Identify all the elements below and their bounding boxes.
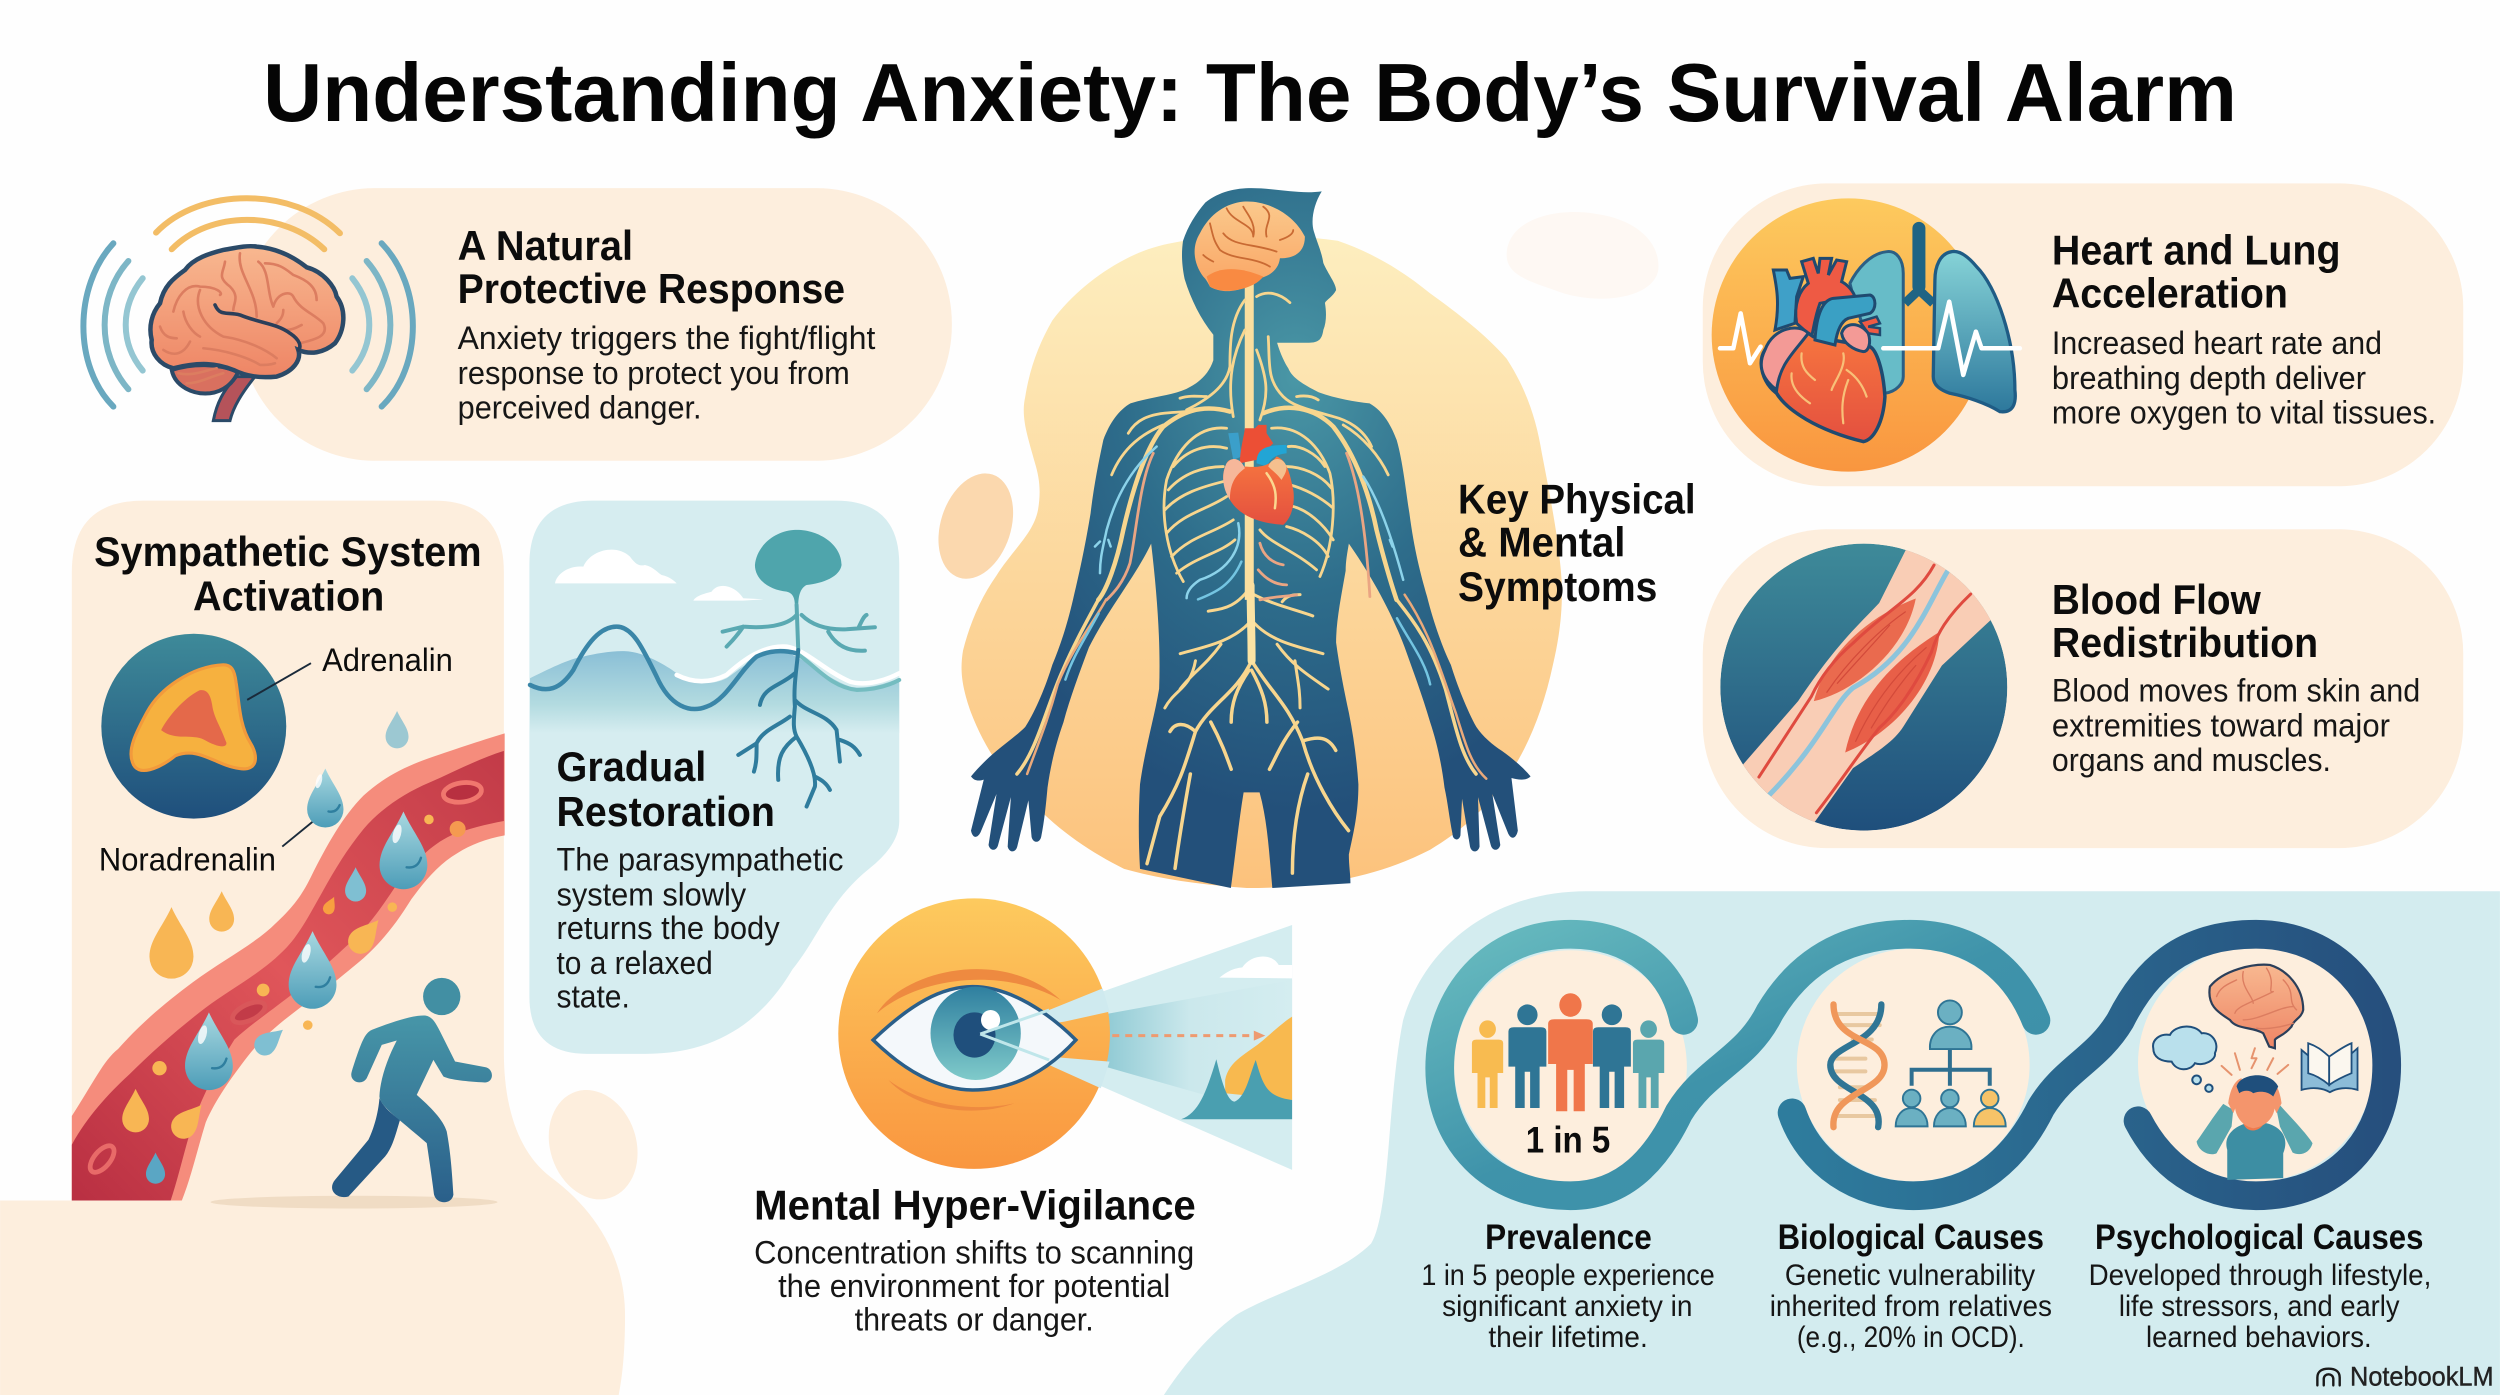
icon: group of people (1472, 993, 1664, 1111)
body text: system slowly (556, 876, 747, 913)
icon: stressed person (2197, 1075, 2313, 1180)
illustration: blood vessel (72, 733, 505, 1200)
icon: running figure (332, 978, 492, 1202)
heading: Blood Flow (2052, 576, 2261, 623)
heading: Mental Hyper-Vigilance (754, 1182, 1196, 1229)
clouds (555, 550, 763, 601)
caption: prevalence (1421, 1218, 1715, 1354)
caption: psychological causes: life stressors, and early (2119, 1290, 2400, 1323)
caption: biological causes: Biological Causes (1778, 1218, 2044, 1257)
label: noradrenalin: Noradrenalin (99, 840, 276, 877)
nerves lower body (1017, 562, 1486, 873)
panel: blood flow redistribution (1703, 529, 2463, 848)
panel: causes and prevalence (1164, 891, 2500, 1395)
heading: Restoration (556, 788, 775, 835)
blood cells (86, 780, 483, 1176)
orange blob backdrop (962, 235, 1562, 888)
label: key physical and mental symptoms: Key Physical (1458, 475, 1696, 522)
heading: Acceleration (2052, 270, 2288, 317)
label: key physical and mental symptoms (1458, 475, 1696, 610)
body text: response to protect you from (458, 354, 850, 391)
body text (458, 319, 875, 425)
label: adrenalin: Adrenalin (322, 641, 453, 678)
caption: prevalence: 1 in 5 people experience (1421, 1259, 1715, 1292)
heading: Protective Response (458, 265, 845, 312)
heading: Sympathetic System (94, 528, 482, 575)
heading (2052, 227, 2340, 317)
icon: brain with alarm waves (83, 198, 413, 421)
icon: muscle and vessels (1720, 540, 2007, 831)
caption: biological causes: (e.g., 20% in OCD). (1797, 1321, 2025, 1354)
panel: heart and lung acceleration (1703, 183, 2463, 486)
label: key physical and mental symptoms: & Mental (1458, 518, 1625, 565)
body text: Blood moves from skin and (2052, 671, 2420, 708)
panel: mental hyper-vigilance (754, 898, 1292, 1337)
vision beam (1045, 925, 1292, 1170)
body text: Increased heart rate and (2052, 324, 2382, 361)
hormone drops in vessel (122, 774, 466, 1184)
decorative orange blob (926, 464, 1026, 589)
caption: biological causes (1770, 1218, 2052, 1354)
body text: perceived danger. (458, 388, 702, 425)
watermark: NotebookLM: NotebookLM (2350, 1360, 2494, 1391)
hormone droplets outside vessel (149, 711, 409, 979)
caption: psychological causes (2089, 1218, 2431, 1354)
body text: The parasympathetic (556, 840, 843, 877)
panel: a natural protective response (83, 188, 952, 461)
caption: prevalence: significant anxiety in (1442, 1290, 1692, 1323)
body text: organs and muscles. (2052, 741, 2331, 778)
icon: brain small (2209, 965, 2303, 1048)
heading: Heart and Lung (2052, 227, 2340, 274)
body text (556, 840, 843, 1015)
heading: Redistribution (2052, 619, 2318, 666)
icon: eye with vision beam (838, 898, 1292, 1170)
label: noradrenalin (99, 818, 317, 877)
caption: prevalence: their lifetime. (1488, 1321, 1648, 1354)
label: adrenalin (247, 641, 453, 700)
icon: neuron tree (723, 530, 875, 807)
icon: open book (2302, 1043, 2358, 1092)
icon: stress marks (2222, 1048, 2288, 1075)
caption: psychological causes: Developed through lifestyle, (2089, 1259, 2431, 1292)
body silhouette (971, 188, 1531, 888)
label: key physical and mental symptoms: Symptoms (1458, 563, 1657, 610)
icon: adrenal gland (101, 634, 286, 819)
caption: psychological causes: Psychological Causes (2095, 1218, 2423, 1257)
icon: brain in head (1195, 202, 1305, 291)
decorative peach blob near restoration panel (535, 1078, 651, 1211)
illustration: psychological causes icons (2153, 965, 2358, 1180)
central figure: nervous system (926, 188, 1562, 888)
caption: biological causes: Genetic vulnerability (1785, 1259, 2035, 1292)
heading (458, 222, 845, 312)
body text (2052, 671, 2420, 778)
caption: biological causes: inherited from relatives (1770, 1290, 2052, 1323)
body text (754, 1233, 1194, 1337)
body text: state. (556, 978, 630, 1015)
icon: heart (1223, 425, 1294, 525)
stat: 1 in 5: 1 in 5 (1526, 1120, 1610, 1161)
icon: thought cloud (2153, 1027, 2216, 1092)
heading (556, 743, 775, 835)
heading (94, 528, 482, 620)
water and hill (530, 627, 899, 733)
body text: more oxygen to vital tissues. (2052, 393, 2436, 430)
icon: heart and lungs (1712, 198, 2020, 472)
body text (2052, 324, 2436, 430)
heading: Activation (193, 573, 384, 620)
body text: extremities toward major (2052, 707, 2390, 744)
caption: prevalence: Prevalence (1485, 1218, 1652, 1257)
icon: DNA helix (1830, 1004, 1885, 1127)
body text: Anxiety triggers the fight/flight (458, 319, 875, 356)
heading: Gradual (556, 743, 706, 790)
icon: family tree (1896, 1000, 2006, 1126)
circle backgrounds (1454, 945, 2374, 1183)
heading (2052, 576, 2318, 666)
panel: sympathetic system activation (0, 501, 625, 1395)
panel: gradual restoration (529, 501, 899, 1054)
decorative pale blob (1507, 212, 1658, 299)
nerves upper body (1095, 280, 1403, 600)
body text: breathing depth deliver (2052, 359, 2366, 396)
ribbon connecting circles (1440, 934, 2387, 1196)
heading: A Natural (458, 222, 633, 269)
body text: returns the body (556, 909, 780, 946)
body text: the environment for potential (778, 1267, 1170, 1304)
body text: to a relaxed (556, 944, 713, 981)
ground shadow (211, 1196, 497, 1208)
body text: Concentration shifts to scanning (754, 1233, 1194, 1270)
title: Understanding Anxiety: The Body’s Survival Alarm (263, 46, 2237, 139)
body text: threats or danger. (855, 1300, 1094, 1337)
caption: psychological causes: learned behaviors. (2146, 1321, 2372, 1354)
